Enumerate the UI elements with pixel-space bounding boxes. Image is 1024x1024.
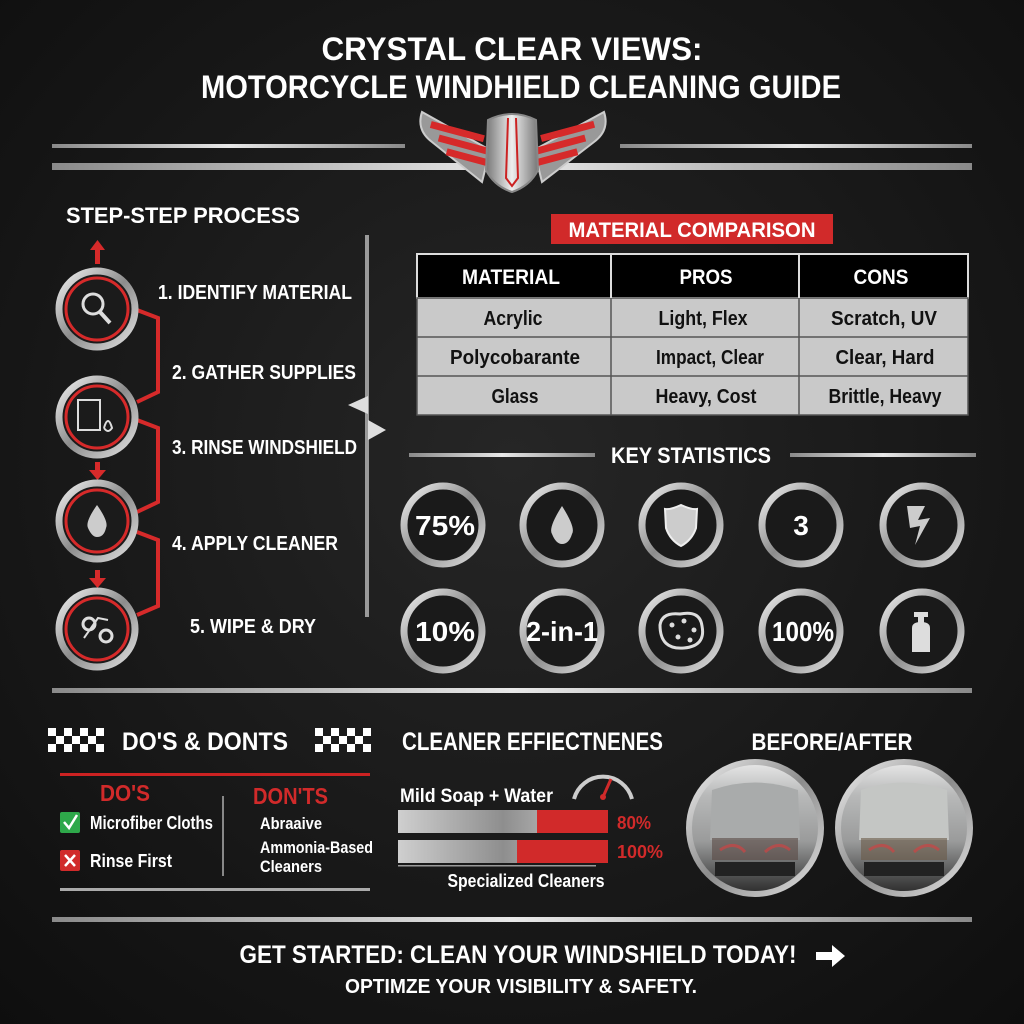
table: material comparison: CONS [854,266,908,289]
panel: key statistics: 2-in-1 [526,616,598,647]
step labels: 3. RINSE WINDSHIELD [172,437,357,459]
table: material comparison: Glass [492,386,538,408]
image: before [689,762,821,894]
icon: check [60,812,80,833]
panel: key statistics: 10% [415,616,475,647]
heading: do's and donts [48,728,371,756]
heading: before/after: BEFORE/AFTER [752,729,912,756]
heading: material comparison [551,214,833,244]
step labels [158,282,357,638]
call to action: OPTIMZE YOUR VISIBILITY & SAFETY. [345,976,697,998]
table: material comparison [417,254,968,415]
panel: key statistics: 75% [415,510,475,541]
heading: material comparison: MATERIAL COMPARISON [568,219,816,242]
panel: do's and don'ts: Abraaive [260,814,322,833]
panel: do's and don'ts [60,773,373,891]
chart: cleaner effectiveness: 80% [617,813,651,833]
arrow: up [90,240,105,264]
image: after [838,762,970,894]
panel: key statistics: 100% [772,616,834,647]
title [201,31,841,105]
call to action: GET STARTED: CLEAN YOUR WINDSHIELD TODAY! [240,941,796,969]
icon: supplies [59,379,135,455]
heading: step process: STEP-STEP PROCESS [66,203,300,228]
call to action [240,941,845,998]
panel: do's and don'ts: Ammonia-Based [260,838,373,857]
icon: magnifier [59,271,135,347]
heading: do's and donts: DO'S & DONTS [122,728,288,756]
table: material comparison: Clear, Hard [836,347,934,369]
table: material comparison: Scratch, UV [831,308,938,330]
icon: drop [59,483,135,559]
icon: broken glass [907,506,930,545]
heading: key statistics [409,443,976,468]
panel: key statistics [404,486,961,670]
icon: spray bottle [912,612,930,652]
arrow: right [816,945,845,967]
chart: cleaner effectiveness: Specialized Cleaners [448,871,604,891]
panel: do's and don'ts: Cleaners [260,857,322,876]
step labels: 4. APPLY CLEANER [172,533,338,555]
logo: winged shield [420,112,606,192]
panel: do's and don'ts: Microfiber Cloths [90,813,213,833]
title: MOTORCYCLE WINDHIELD CLEANING GUIDE [201,69,841,105]
panel: do's and don'ts: DON'TS [253,783,328,809]
step labels: 1. IDENTIFY MATERIAL [158,282,352,304]
step labels: 2. GATHER SUPPLIES [172,362,356,384]
chart: cleaner effectiveness: Mild Soap + Water [400,786,554,807]
chart: cleaner effectiveness [398,777,663,891]
step labels: 5. WIPE & DRY [190,616,317,638]
heading: cleaner effectiveness: CLEANER EFFIECTNENES [402,728,663,756]
icon: shield [665,505,697,546]
table: material comparison: Light, Flex [658,308,748,330]
table: material comparison: PROS [680,266,732,289]
table: material comparison: MATERIAL [462,266,560,289]
table: material comparison: Brittle, Heavy [828,386,942,408]
table: material comparison: Polycobarante [450,347,580,369]
table: material comparison: Heavy, Cost [656,386,757,408]
panel: do's and don'ts: DO'S [100,780,150,806]
chart: cleaner effectiveness: 100% [617,842,663,862]
icon: wipe [59,591,135,667]
table: material comparison: Impact, Clear [656,347,764,369]
panel: step process [59,240,357,667]
panel: do's and don'ts: Rinse First [90,851,172,871]
icon: cross [60,850,80,871]
panel: key statistics: 3 [793,510,809,541]
title: CRYSTAL CLEAR VIEWS: [322,31,702,67]
icon: gauge [574,777,632,800]
icon: sponge [660,613,703,648]
icon: drop [551,506,573,544]
table: material comparison: Acrylic [484,308,542,330]
heading: key statistics: KEY STATISTICS [611,443,771,468]
